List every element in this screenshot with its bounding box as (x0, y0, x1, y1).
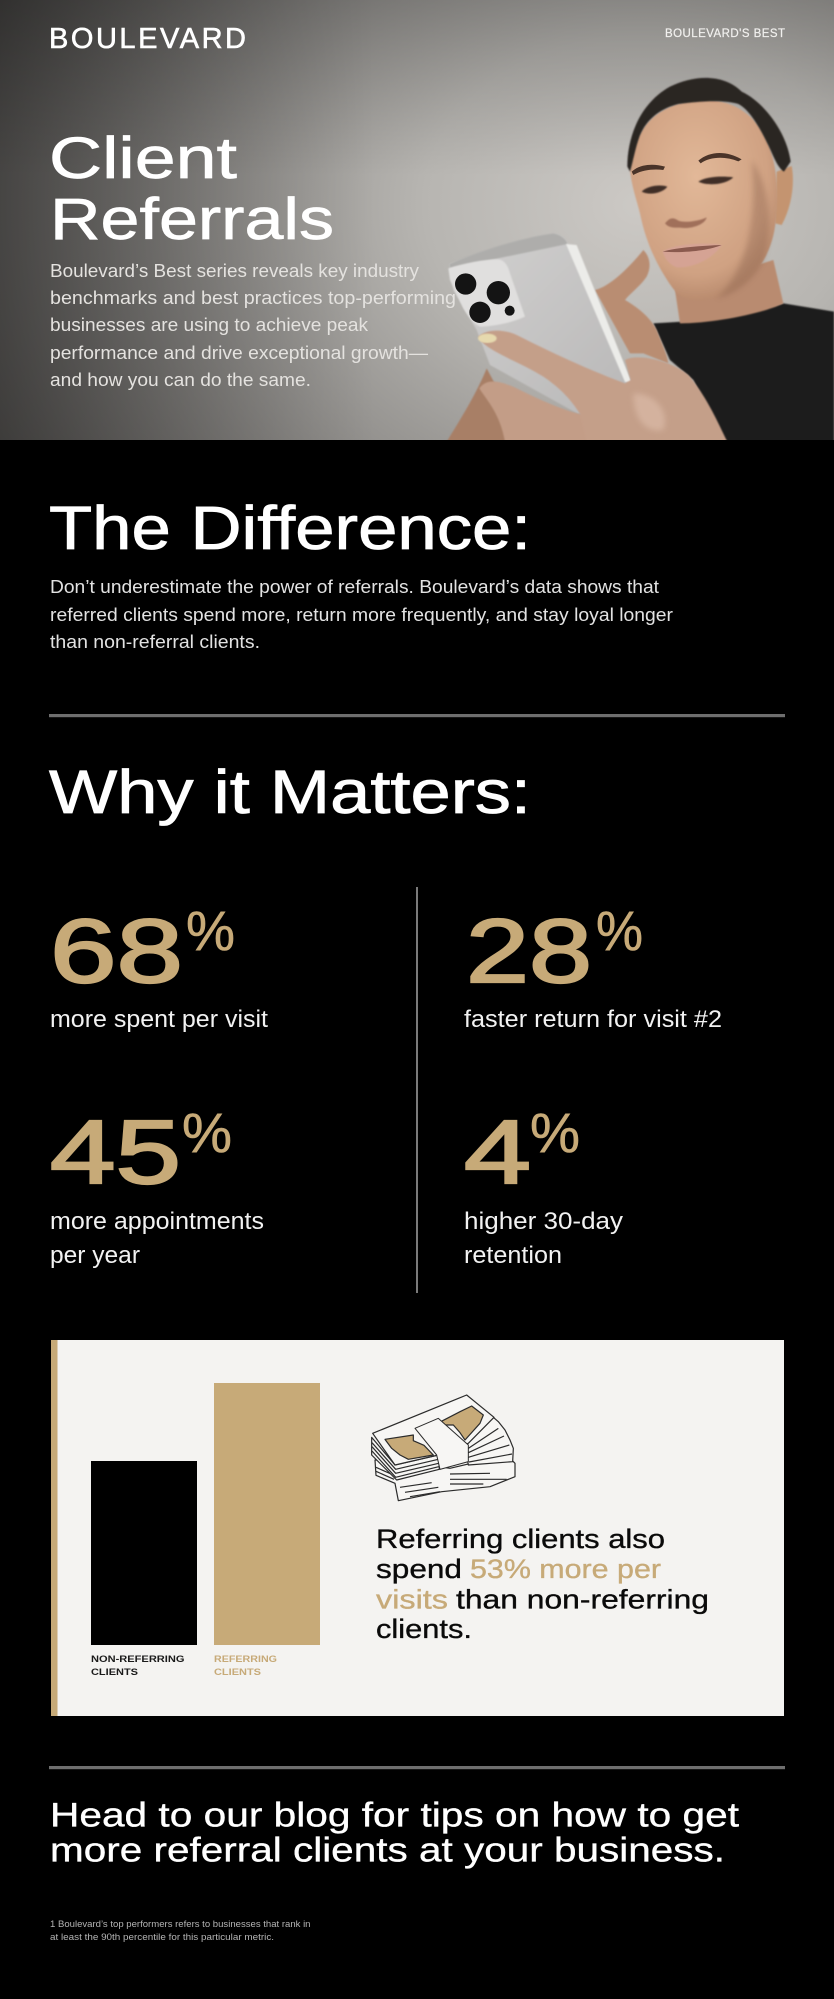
neck (675, 260, 783, 323)
bar label: referring clients: REFERRING (214, 1654, 277, 1665)
fingernail (478, 334, 497, 343)
hero intro text: Boulevard’s Best series reveals key industry (50, 260, 420, 281)
bar: referring clients (214, 1383, 320, 1645)
footnote: at least the 90th percentile for this particular metric. (50, 1932, 274, 1943)
hero photo: person holding phone (447, 78, 834, 442)
title (49, 126, 334, 252)
hero intro text: businesses are using to achieve peak (50, 314, 369, 335)
stat: 28 percent: % (596, 899, 643, 962)
panel: referring clients comparison (51, 1340, 784, 1716)
hero intro text (50, 260, 456, 390)
raised hand at the jaw (595, 250, 668, 363)
hero background gradient (0, 0, 834, 440)
face (630, 100, 777, 301)
stat: 45 percent: per year (50, 1242, 140, 1269)
hero intro text: benchmarks and best practices top-performing (50, 287, 456, 308)
nose shadow (665, 217, 707, 228)
stat: 28 percent: faster return for visit #2 (464, 1006, 722, 1033)
bar label: non-referring clients (91, 1654, 184, 1678)
callout text: Referring clients also (376, 1524, 665, 1554)
stat: 68 percent: % (186, 899, 235, 962)
front hand and pointing finger (478, 331, 727, 442)
stat: 45 percent: more appointments (50, 1208, 264, 1235)
stat: 4 percent: 4 (464, 1103, 531, 1203)
hand highlight (633, 393, 665, 430)
stat: 45 percent: % (182, 1101, 232, 1164)
series tag: BOULEVARD'S BEST (665, 28, 785, 40)
bar label: non-referring clients: CLIENTS (91, 1667, 138, 1678)
heading: Why it Matters: Why it Matters: (49, 758, 531, 826)
lower finger (480, 381, 586, 440)
bar label: referring clients: CLIENTS (214, 1667, 261, 1678)
callout text: 53% more per (470, 1554, 661, 1584)
callout text (376, 1524, 709, 1644)
bar chart (91, 1383, 320, 1678)
forearm (447, 368, 510, 442)
stat: 45 percent: 45 (50, 1103, 181, 1203)
stat: 4 percent (464, 1101, 623, 1269)
difference paragraph: than non-referral clients. (50, 631, 260, 652)
stat: 68 percent: 68 (50, 902, 183, 1002)
title: Client (49, 126, 237, 191)
phone side edge (566, 244, 632, 383)
logo: BOULEVARD (49, 23, 246, 55)
panel accent strip (51, 1340, 58, 1716)
stat: 28 percent (464, 899, 722, 1033)
bar: non-referring clients (91, 1461, 197, 1645)
shirt (653, 303, 834, 442)
footnote: 1 Boulevard’s top performers refers to businesses that rank in (50, 1919, 310, 1930)
callout text: clients. (376, 1614, 472, 1644)
call to action: Head to our blog for tips on how to get (50, 1796, 740, 1834)
ear (775, 166, 793, 225)
stat: 4 percent: higher 30-day (464, 1208, 623, 1235)
hero intro text: performance and drive exceptional growth— (50, 342, 429, 363)
eyes (642, 177, 733, 194)
heading: The Difference: The Difference: (49, 494, 531, 562)
panel background (51, 1340, 784, 1716)
stat: 28 percent: 28 (466, 902, 592, 1002)
hero panel (0, 0, 834, 442)
callout text: spend (376, 1554, 462, 1584)
difference paragraph: referred clients spend more, return more frequently, and stay loyal longer (50, 604, 673, 625)
bar label: referring clients (214, 1654, 277, 1678)
stats grid (50, 887, 722, 1293)
cheek shading (722, 164, 770, 296)
icon: stack of money (372, 1395, 515, 1501)
stat: 4 percent: retention (464, 1242, 562, 1269)
eyebrows (632, 153, 742, 175)
bar label: non-referring clients: NON-REFERRING (91, 1654, 184, 1665)
call to action: more referral clients at your business. (50, 1832, 725, 1870)
camera lenses (455, 273, 515, 323)
call to action (50, 1796, 740, 1870)
callout text: visits (376, 1584, 448, 1614)
stat: 68 percent (50, 899, 268, 1033)
title: Referrals (50, 187, 334, 252)
callout text: than non-referring (456, 1584, 709, 1614)
difference paragraph (50, 576, 673, 652)
difference paragraph: Don’t underestimate the power of referrals. Boulevard’s data shows that (50, 576, 659, 597)
phone top edge (449, 233, 567, 268)
camera bump (448, 259, 525, 327)
stat: 45 percent (50, 1101, 264, 1269)
hair (627, 78, 791, 172)
lip line (663, 245, 722, 252)
hero intro text: and how you can do the same. (50, 369, 311, 390)
phone back (452, 245, 624, 414)
stat: 68 percent: more spent per visit (50, 1006, 268, 1033)
footnote (50, 1919, 310, 1943)
lips (663, 244, 722, 267)
stat: 4 percent: % (530, 1101, 580, 1164)
